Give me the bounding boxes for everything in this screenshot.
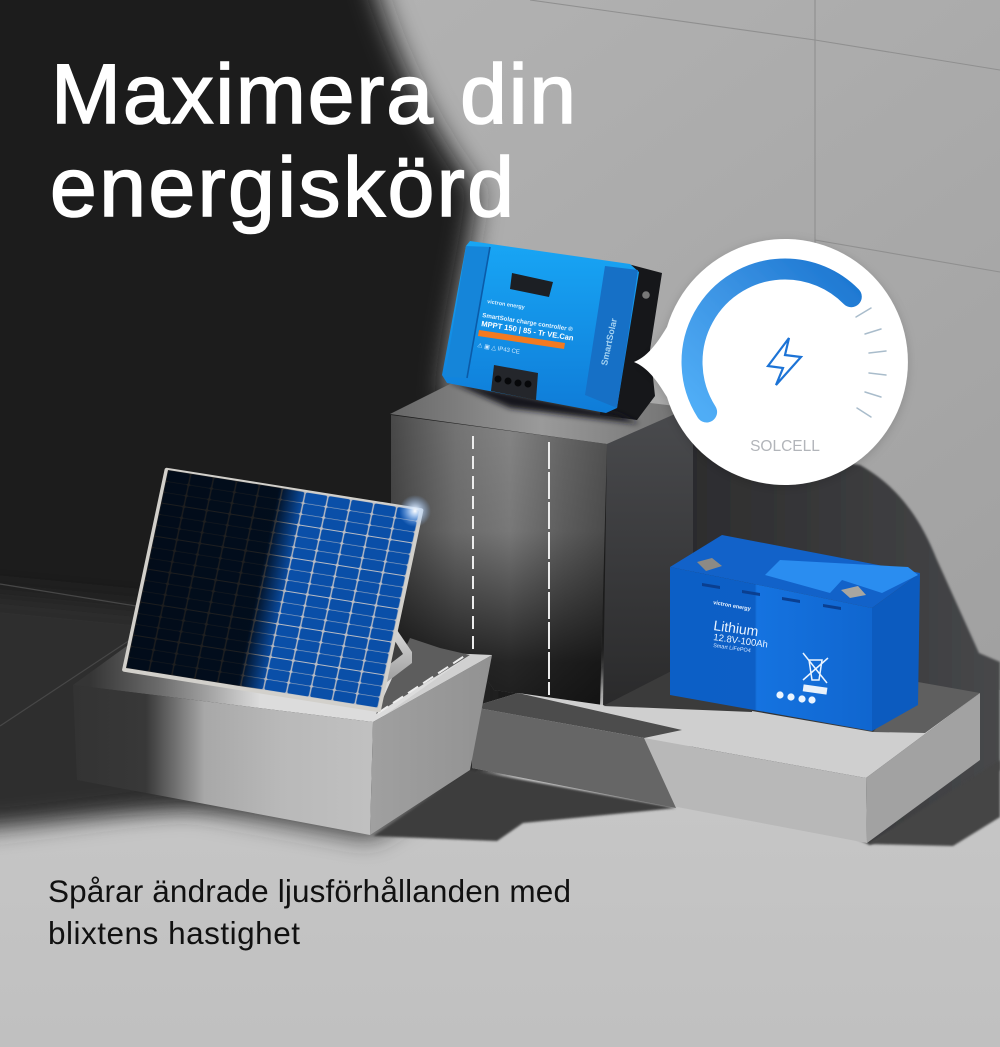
- battery crossed bin icon: [803, 653, 828, 683]
- dashed light lines on block: [473, 436, 549, 695]
- large wall shadow: [0, 0, 700, 810]
- icon: lightning bolt: [768, 338, 801, 385]
- display cover: [510, 273, 553, 297]
- title: [50, 47, 576, 234]
- dark floor shadow: [0, 590, 480, 838]
- certification icons: ⚠ ▣ △ IP43 CE: [477, 342, 520, 356]
- battery chemistry: Smart LiFePO4: [713, 643, 751, 654]
- panel corner glint: [399, 495, 431, 527]
- floor: [0, 590, 1000, 1047]
- battery name: Lithium: [713, 617, 760, 639]
- left room edges: [0, 584, 136, 726]
- gauge label: SOLCELL: [750, 438, 820, 455]
- battery voltage: 12.8V-100Ah: [713, 632, 769, 651]
- terminal block: [491, 365, 538, 400]
- panel stand: [387, 630, 412, 682]
- solar gauge callout: [634, 239, 908, 485]
- gauge arc: [692, 269, 851, 412]
- step with battery: [472, 660, 980, 843]
- description: Spårar ändrade ljusförhållanden med: [48, 873, 571, 909]
- mounting plate: [600, 264, 662, 420]
- floor shadow right: [868, 760, 1000, 846]
- description: [48, 873, 571, 951]
- charger shadow: [446, 380, 640, 424]
- wall background: [0, 0, 1000, 720]
- battery marks: [803, 684, 827, 695]
- battery logo text: victron energy: [713, 600, 752, 613]
- tower block: [390, 380, 693, 706]
- description: blixtens hastighet: [48, 915, 300, 951]
- charger model text: SmartSolar charge controller ®: [482, 312, 574, 333]
- battery vents: [702, 583, 841, 610]
- gauge ticks: [856, 308, 886, 417]
- charge controller: [442, 241, 639, 413]
- charger type text: MPPT 150 | 85 - Tr VE.Can: [481, 319, 575, 343]
- lower right wall shadow: [690, 440, 1000, 845]
- floor shadow under blocks: [373, 770, 676, 841]
- title: energiskörd: [50, 140, 514, 234]
- callout bubble: [634, 239, 908, 485]
- side label: SmartSolar: [599, 317, 619, 366]
- charger logo text: victron energy: [487, 299, 526, 311]
- wall tile joints: [530, 0, 1000, 530]
- keyhole slot: [642, 291, 650, 299]
- title: Maximera din: [51, 47, 576, 141]
- battery lid: [765, 560, 918, 593]
- battery terminals: [697, 558, 722, 571]
- solar panel: [122, 467, 424, 713]
- battery: [670, 535, 920, 731]
- orange stripe: [478, 330, 565, 349]
- step with solar panel: [73, 638, 492, 835]
